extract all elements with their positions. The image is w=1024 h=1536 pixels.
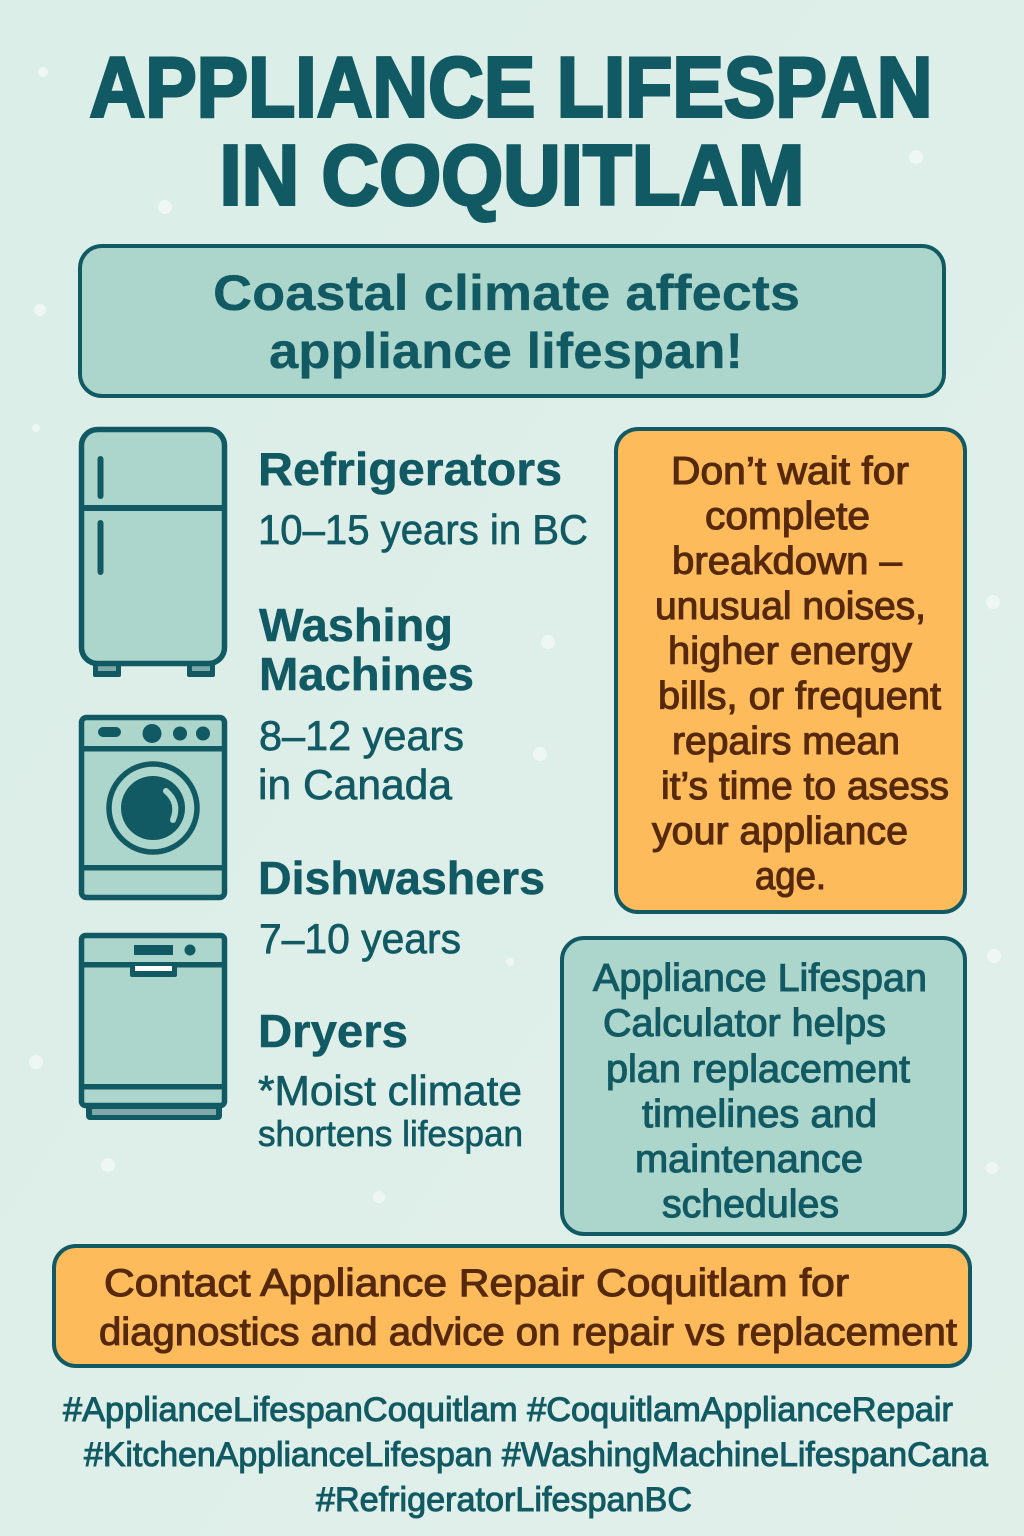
panel text: plan replacement <box>606 1048 910 1091</box>
hashtags: #ApplianceLifespanCoquitlam #CoquitlamApplianceRepair <box>63 1391 953 1429</box>
item: dryers <box>258 1005 523 1154</box>
callout: warning signs <box>616 429 965 912</box>
hashtags: #KitchenApplianceLifespan #WashingMachineLifespanCana <box>84 1436 988 1474</box>
panel text <box>593 957 927 1226</box>
callout text: it’s time to asess <box>661 765 949 808</box>
hashtags: #RefrigeratorLifespanBC <box>316 1481 692 1519</box>
item: refrigerators: Refrigerators <box>258 443 562 495</box>
icon: washing machine <box>81 718 225 898</box>
item: washing machines <box>258 599 474 808</box>
item: dryers: Dryers <box>258 1005 408 1057</box>
icon: refrigerator <box>81 430 225 677</box>
panel text: maintenance <box>635 1138 863 1181</box>
banner text: appliance lifespan! <box>269 323 743 379</box>
panel text: Appliance Lifespan <box>593 957 927 1000</box>
item: dryers: shortens lifespan <box>258 1113 523 1154</box>
call to action text <box>99 1262 957 1354</box>
item: washing machines: in Canada <box>258 761 453 808</box>
title <box>90 40 932 224</box>
title: IN COQUITLAM <box>220 128 804 224</box>
callout text: bills, or frequent <box>658 675 941 718</box>
item: washing machines: Washing <box>259 599 453 651</box>
callout text <box>652 450 949 898</box>
title: APPLIANCE LIFESPAN <box>90 40 932 136</box>
callout text: age. <box>755 855 826 898</box>
call to action <box>54 1246 970 1366</box>
callout text: unusual noises, <box>655 585 926 628</box>
callout text: repairs mean <box>672 720 900 763</box>
item: dishwashers: 7–10 years <box>259 915 461 962</box>
panel: lifespan calculator <box>562 938 965 1234</box>
item: refrigerators <box>258 443 588 553</box>
banner: coastal climate <box>80 246 944 396</box>
panel text: timelines and <box>642 1093 877 1136</box>
callout text: complete <box>705 495 870 538</box>
item: dishwashers: Dishwashers <box>258 852 545 904</box>
callout text: your appliance <box>652 810 908 853</box>
item: washing machines: 8–12 years <box>259 712 464 759</box>
callout text: Don’t wait for <box>671 450 909 493</box>
callout text: higher energy <box>668 630 913 673</box>
call to action text: diagnostics and advice on repair vs replacement <box>99 1311 957 1354</box>
panel text: schedules <box>662 1183 839 1226</box>
item: refrigerators: 10–15 years in BC <box>258 506 588 553</box>
item: dryers: *Moist climate <box>258 1067 522 1114</box>
panel text: Calculator helps <box>603 1002 886 1045</box>
call to action text: Contact Appliance Repair Coquitlam for <box>104 1262 849 1305</box>
callout text: breakdown – <box>672 540 902 583</box>
banner text <box>213 265 800 379</box>
hashtags <box>63 1391 988 1519</box>
icon: dishwasher <box>81 936 225 1120</box>
item: washing machines: Machines <box>259 648 474 700</box>
item: dishwashers <box>258 852 545 962</box>
banner text: Coastal climate affects <box>213 265 800 321</box>
